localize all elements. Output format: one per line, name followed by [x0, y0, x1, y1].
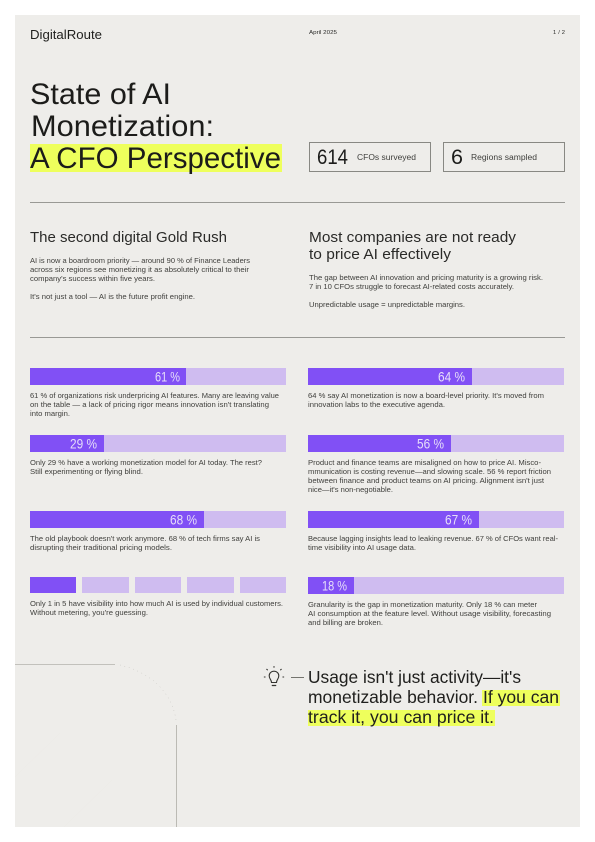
stat: 56 %: 56 % [417, 436, 444, 452]
body text: It's not just a tool — AI is the future profit engine. [30, 292, 195, 301]
stat: Regions sampled: 6 [451, 146, 463, 169]
stat: 68 %: 68 % [170, 512, 197, 528]
callout: If you can [483, 687, 559, 707]
page number: 1 / 2 [553, 30, 565, 36]
stat: 18 % [308, 577, 564, 627]
heading: to price AI effectively [309, 246, 452, 263]
stat: 68 %: The old playbook doesn't work anymore. 68 % of tech firms say AI is [30, 534, 260, 543]
stat: 56 %: Product and finance teams are misaligned on how to price AI. Misco- [308, 458, 542, 467]
title [30, 78, 282, 175]
stat: 61 % [30, 368, 286, 418]
stat: 64 %: innovation labs to the executive agenda. [308, 400, 445, 409]
stat: 29 %: Still experimenting or flying blind. [30, 467, 143, 476]
title: A CFO Perspective [30, 142, 281, 175]
stat: Regions sampled: Regions sampled [471, 153, 537, 162]
stat: 68 % [30, 511, 286, 552]
decorative corner outline [15, 664, 176, 827]
logo: DigitalRoute [30, 27, 102, 42]
stat: 61 %: on the table — a lack of pricing rigor means innovation isn't translating [30, 400, 269, 409]
body text [309, 273, 543, 309]
stat: 56 %: between finance and product teams on AI pricing. Alignment isn't just [308, 476, 544, 485]
body text: AI is now a boardroom priority — around 90 % of Finance Leaders [30, 256, 250, 265]
stat: 61 %: 61 % of organizations risk underpricing AI features. Many are leaving value [30, 391, 279, 400]
stat: 67 %: 67 % [445, 512, 472, 528]
stat: 1 in 5: Only 1 in 5 have visibility into how much AI is used by individual customers. [30, 599, 283, 608]
stat: 1 in 5 [30, 577, 286, 617]
body text: The gap between AI innovation and pricing maturity is a growing risk. [309, 273, 543, 282]
stat: 67 %: time visibility into AI usage data. [308, 543, 416, 552]
stat: 61 %: 61 % [155, 368, 180, 384]
callout: monetizable behavior. [308, 687, 478, 707]
callout: track it, you can price it. [308, 707, 494, 727]
stat: 18 %: and billing are broken. [308, 618, 383, 627]
header [30, 27, 565, 42]
title: Monetization: [31, 110, 214, 143]
heading: Most companies are not ready [309, 229, 516, 246]
stat: 29 %: 29 % [70, 436, 97, 452]
stat: 64 %: 64 % say AI monetization is now a board-level priority. It's moved from [308, 391, 544, 400]
section: the second digital gold rush [30, 229, 250, 301]
heading: The second digital Gold Rush [30, 229, 227, 246]
icon: light bulb [264, 666, 284, 686]
stat: 56 %: nice—it's non-negotiable. [308, 485, 393, 494]
heading [309, 229, 516, 263]
body text [30, 256, 250, 301]
callout [308, 667, 560, 727]
date: April 2025 [309, 30, 337, 36]
stat: 56 %: mmunication is costing revenue—and slowing scale. 56 % report friction [308, 467, 551, 476]
stat: CFOs surveyed: 614 [317, 146, 348, 169]
stat: 64 %: 64 % [438, 368, 465, 384]
callout: Usage isn't just activity—it's [308, 667, 521, 687]
arrow: dash to callout [291, 676, 304, 678]
stat: 1 in 5: Without metering, you're guessing. [30, 608, 148, 617]
stat: 29 %: Only 29 % have a working monetization model for AI today. The rest? [30, 458, 262, 467]
stat: 18 %: Granularity is the gap in monetization maturity. Only 18 % can meter [308, 600, 538, 609]
title: State of AI [30, 78, 171, 111]
stat: 18 %: AI consumption at the feature level. Without usage visibility, forecasting [308, 609, 551, 618]
body text: company's success within five years. [30, 274, 155, 283]
stat: 67 % [308, 511, 564, 552]
stat: Regions sampled [444, 142, 564, 172]
stat: 64 % [308, 368, 564, 409]
stat: CFOs surveyed: CFOs surveyed [357, 153, 416, 162]
stat: 29 % [30, 435, 286, 476]
stat: CFOs surveyed [310, 142, 430, 172]
stat: 18 %: 18 % [322, 578, 347, 594]
stat: 68 %: disrupting their traditional pricing models. [30, 543, 172, 552]
body text: 7 in 10 CFOs struggle to forecast AI-related costs accurately. [309, 282, 514, 291]
stat: 56 % [308, 435, 564, 494]
body text: Unpredictable usage = unpredictable margins. [309, 300, 465, 309]
section: not ready to price AI [309, 229, 543, 309]
stat: 61 %: into margin. [30, 409, 70, 418]
stat: 67 %: Because lagging insights lead to leaking revenue. 67 % of CFOs want real- [308, 534, 559, 543]
body text: across six regions see monetizing it as absolutely critical to their [30, 265, 250, 274]
